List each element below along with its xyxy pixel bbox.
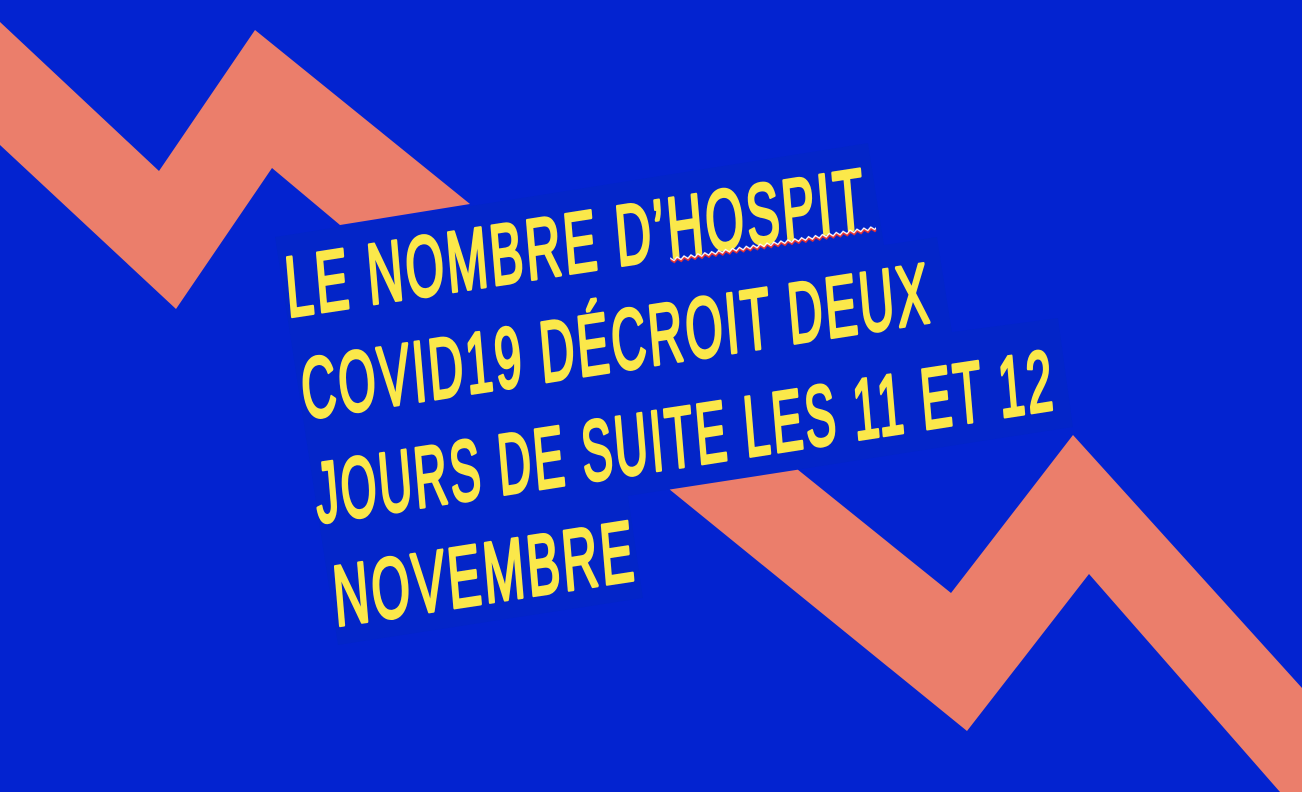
headline line 4: NOVEMBRE [330, 503, 640, 645]
spellcheck squiggle underline [670, 225, 877, 264]
headline text [282, 151, 1059, 645]
headline highlight background [275, 143, 1073, 645]
headline line 1: LE NOMBRE D’HOSPIT [282, 151, 871, 336]
declining arrow line: lower segment [669, 435, 1302, 792]
declining arrow line: upper segment [0, 22, 470, 309]
